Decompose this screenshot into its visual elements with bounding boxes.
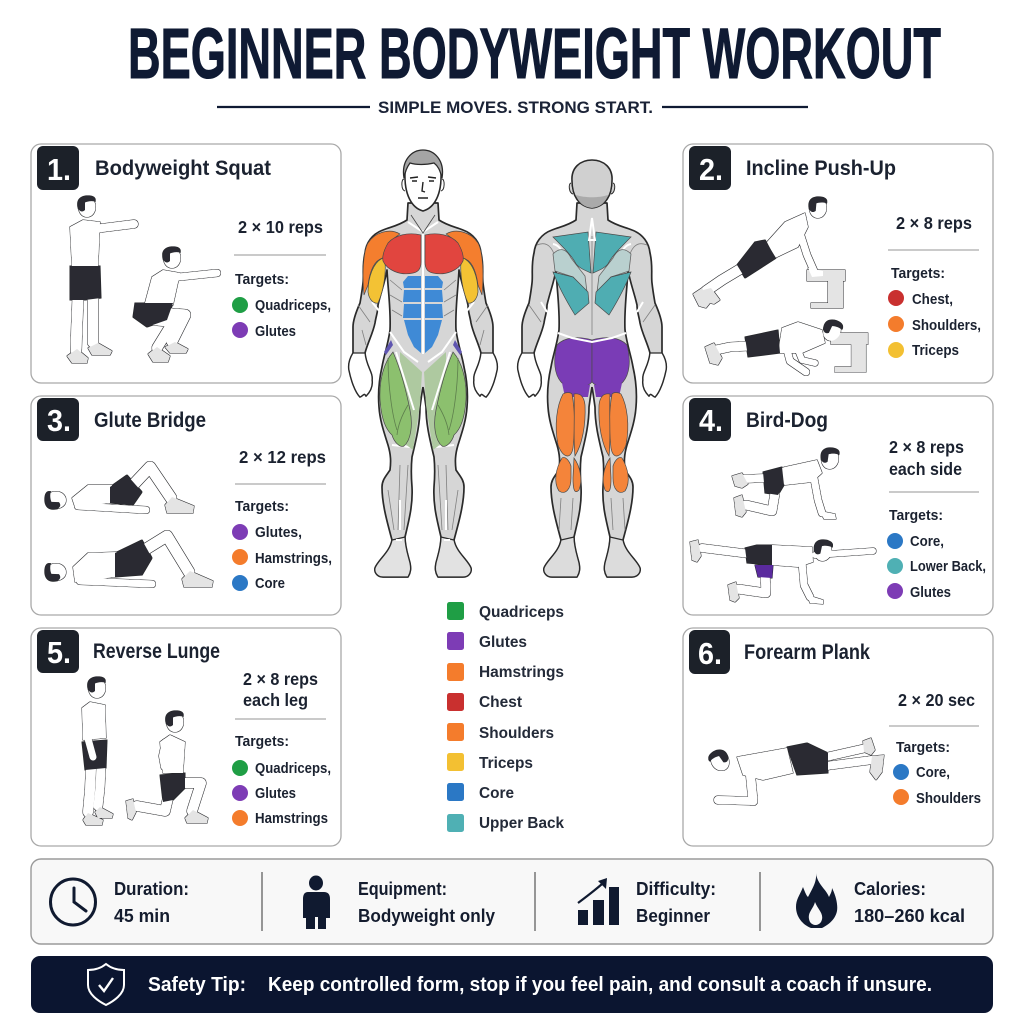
targets: Core, (916, 765, 950, 781)
sets and reps: 2 × 8 reps (889, 437, 964, 457)
muscle: trapezius (553, 232, 591, 273)
muscle: calves (556, 457, 571, 492)
heading: bird-dog: Bird-Dog (746, 408, 828, 432)
targets: Glutes (255, 786, 296, 802)
number badge 1 (37, 146, 79, 190)
muscle: abs (403, 276, 421, 353)
sets and reps: 2 × 8 reps (243, 669, 318, 689)
targets: Chest, (912, 292, 953, 308)
targets (893, 739, 981, 807)
targets: Glutes, (255, 525, 302, 541)
icon: flame (796, 873, 837, 928)
panel: exercise 5 reverse lunge (31, 628, 341, 846)
targets: Core, (910, 534, 944, 550)
number badge 4: 4. (699, 403, 723, 438)
legend: muscle colours: Chest (479, 694, 523, 711)
legend: muscle colours: Hamstrings (479, 664, 564, 681)
panel: exercise 5 reverse lunge: each leg (243, 690, 308, 710)
targets: Targets: (235, 498, 289, 515)
targets: Glutes (910, 585, 951, 601)
muscle: upper back light (553, 250, 587, 292)
head (402, 150, 444, 211)
number badge 5 (37, 630, 79, 673)
muscle: hamstrings (556, 392, 574, 456)
sets and reps: 2 × 12 reps (239, 447, 326, 467)
sets and reps: 2 × 8 reps (896, 213, 972, 233)
heading: bodyweight squat: Bodyweight Squat (95, 156, 271, 180)
legend: muscle colours: Core (479, 785, 514, 802)
muscle: glutes (555, 338, 592, 387)
panel: workout summary (31, 859, 993, 944)
illustration: bird-dog (690, 447, 873, 604)
illustration: glute bridge (44, 467, 213, 587)
safety tip text: Keep controlled form, stop if you feel pain, and consult a coach if unsure. (268, 974, 932, 996)
hand and foot highlights (349, 353, 372, 397)
muscle: latissimus (553, 272, 589, 315)
calories: 180–260 kcal (854, 906, 965, 926)
muscle: triceps (368, 258, 385, 303)
legend: muscle colours: Triceps (479, 755, 533, 772)
equipment: Bodyweight only (358, 906, 495, 926)
icon: person (303, 876, 330, 929)
targets (888, 265, 981, 359)
heading: glute bridge: Glute Bridge (94, 408, 206, 432)
icon: clock (50, 879, 96, 925)
duration: 45 min (114, 906, 170, 926)
heading: forearm plank: Forearm Plank (744, 640, 870, 664)
illustration: forearm plank (707, 738, 884, 801)
number badge 1: 1. (47, 152, 71, 187)
difficulty (636, 879, 716, 926)
number badge 3 (37, 398, 79, 441)
number badge 4 (689, 398, 731, 441)
legend: muscle colours (447, 602, 564, 832)
icon: shield check (88, 964, 124, 1005)
muscle: shoulder (363, 231, 400, 295)
muscle: chest (383, 234, 421, 274)
muscle: quadriceps (400, 352, 422, 450)
targets (887, 507, 986, 601)
targets (232, 733, 331, 827)
safety tip text: Safety Tip: (148, 974, 246, 996)
safety tip bar (31, 956, 993, 1013)
targets (232, 271, 331, 340)
number badge 2: 2. (699, 152, 723, 187)
targets: Triceps (912, 343, 959, 359)
targets: Core (255, 576, 285, 592)
illustration: squat (67, 196, 217, 363)
panel: exercise 3 glute bridge (31, 396, 341, 615)
illustration: incline push-up (693, 196, 868, 372)
sets and reps: 2 × 20 sec (898, 690, 975, 710)
heading: reverse lunge: Reverse Lunge (93, 639, 220, 663)
back of head (569, 160, 615, 208)
equipment: Equipment: (358, 879, 447, 899)
targets: Targets: (235, 271, 289, 288)
number badge 6 (689, 630, 730, 674)
front anatomy figure (349, 150, 497, 577)
panel: exercise 2 incline push-up (683, 144, 993, 383)
difficulty: Beginner (636, 906, 710, 926)
targets: Hamstrings, (255, 551, 332, 567)
panel: exercise 6 forearm plank (683, 628, 993, 846)
number badge 2 (689, 146, 731, 190)
targets: Quadriceps, (255, 761, 331, 777)
number badge 6: 6. (698, 636, 722, 671)
illustration: reverse lunge (82, 677, 208, 825)
legend: muscle colours: Upper Back (479, 815, 564, 832)
subtitle: SIMPLE MOVES. STRONG START. (378, 98, 653, 117)
targets: Targets: (235, 733, 289, 750)
targets: Targets: (889, 507, 943, 524)
targets (232, 498, 332, 592)
targets: Hamstrings (255, 811, 328, 827)
calories: Calories: (854, 879, 926, 899)
difficulty: Difficulty: (636, 879, 716, 899)
targets: Lower Back, (910, 559, 986, 575)
targets: Glutes (255, 324, 296, 340)
number badge 5: 5. (47, 635, 71, 670)
heading: incline push-up: Incline Push-Up (746, 156, 896, 180)
targets: Quadriceps, (255, 298, 331, 314)
panel: exercise 1 bodyweight squat (31, 144, 341, 383)
targets: Targets: (896, 739, 950, 756)
equipment (358, 879, 495, 926)
back anatomy figure (518, 160, 666, 577)
targets: Targets: (891, 265, 945, 282)
legend: muscle colours: Shoulders (479, 725, 554, 742)
targets: Shoulders, (912, 318, 981, 334)
panel: exercise 4 bird-dog (683, 396, 993, 615)
panel: exercise 4 bird-dog: each side (889, 459, 962, 479)
calories (854, 879, 965, 926)
duration: Duration: (114, 879, 189, 899)
targets: Shoulders (916, 791, 981, 807)
number badge 3: 3. (47, 403, 71, 438)
duration (114, 879, 189, 926)
legend: muscle colours: Quadriceps (479, 604, 564, 621)
icon: rising bars (578, 878, 619, 925)
legend: muscle colours: Glutes (479, 634, 527, 651)
sets and reps: 2 × 10 reps (238, 217, 323, 237)
